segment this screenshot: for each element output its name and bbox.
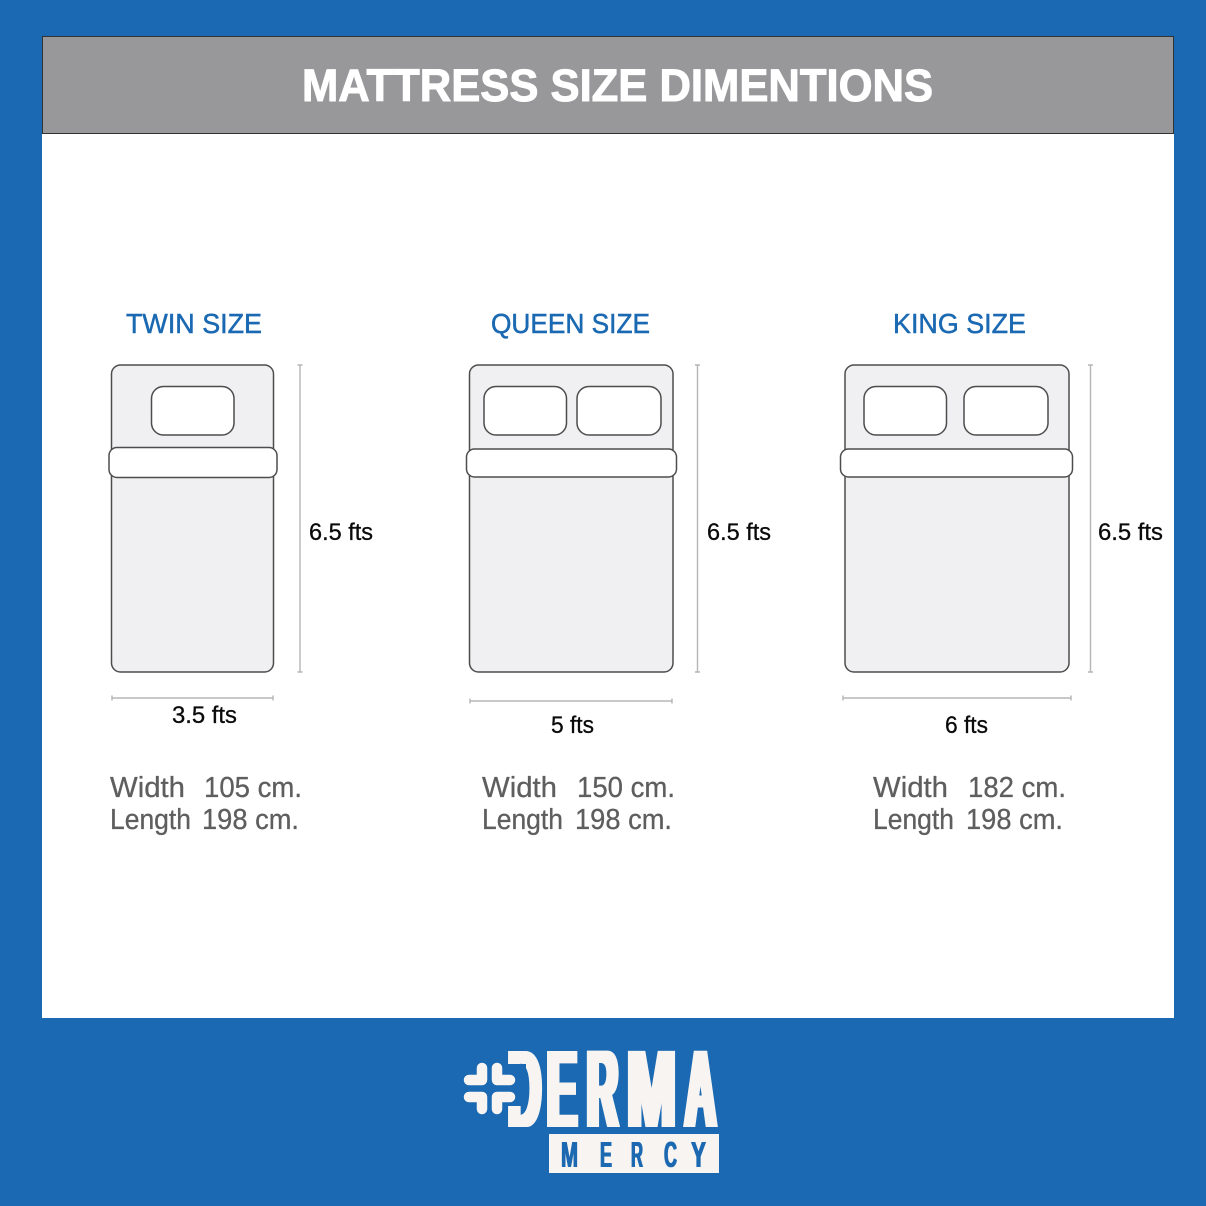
header band with title [42, 36, 1174, 134]
heading: twin size: TWIN SIZE [126, 308, 262, 339]
logo: Derma Mercy [469, 1028, 719, 1175]
text: queen measurements [482, 772, 675, 836]
text: queen measurements: Length [482, 804, 563, 836]
text: king measurements [873, 772, 1066, 836]
dimension: queen length: 6.5 fts [707, 519, 771, 546]
logo wordmark: DERMA: E [547, 1028, 577, 1151]
logo tag: MERCY: M [561, 1134, 578, 1175]
logo tag: MERCY: R [631, 1134, 643, 1175]
text: queen measurements: Width [482, 772, 557, 804]
logo wordmark: DERMA: R [587, 1028, 618, 1151]
panel: twin size [109, 308, 373, 836]
logo wordmark: DERMA [508, 1028, 716, 1151]
dimension: king length: 6.5 fts [1098, 519, 1163, 546]
dimension: king length [1088, 365, 1163, 672]
diagram: king mattress [840, 365, 1072, 672]
dimension: king width: 6 fts [945, 712, 988, 739]
logo wordmark: DERMA: M [627, 1028, 676, 1151]
heading: queen size: QUEEN SIZE [491, 308, 650, 339]
text: twin measurements: 105 cm. [204, 772, 302, 804]
dimension: twin width [112, 696, 273, 729]
dimension: king width [843, 696, 1071, 739]
title: MATTRESS SIZE DIMENTIONS [302, 60, 933, 111]
text: twin measurements: Length [110, 804, 191, 836]
text: twin measurements: 198 cm. [202, 804, 299, 836]
logo wordmark: DERMA: D [508, 1028, 541, 1151]
dimension: twin length: 6.5 fts [309, 519, 373, 546]
text: king measurements: Width [873, 772, 948, 804]
diagram: twin mattress [109, 365, 277, 672]
icon: medical cross of four lobes [469, 1068, 510, 1109]
text: queen measurements: 150 cm. [577, 772, 675, 804]
dimension: queen width: 5 fts [551, 712, 594, 739]
text: twin measurements: Width [110, 772, 185, 804]
logo tag: MERCY: E [600, 1134, 612, 1175]
logo tag: MERCY: Y [691, 1134, 706, 1175]
text: king measurements: 182 cm. [968, 772, 1066, 804]
text: A [685, 1028, 716, 1151]
text: queen measurements: 198 cm. [575, 804, 672, 836]
panel: king size [840, 308, 1163, 836]
text: king measurements: 198 cm. [966, 804, 1063, 836]
logo tag: MERCY: C [664, 1134, 677, 1175]
panel: white content area [42, 133, 1174, 1018]
text: king measurements: Length [873, 804, 954, 836]
logo tag: MERCY [549, 1134, 719, 1175]
dimension: queen length [695, 365, 771, 672]
dimension: twin width: 3.5 fts [172, 702, 237, 729]
text: twin measurements [110, 772, 302, 836]
dimension: twin length [298, 365, 373, 672]
panel: queen size [466, 308, 771, 836]
heading: king size: KING SIZE [893, 308, 1026, 339]
dimension: queen width [470, 698, 672, 739]
diagram: queen mattress [466, 365, 676, 672]
